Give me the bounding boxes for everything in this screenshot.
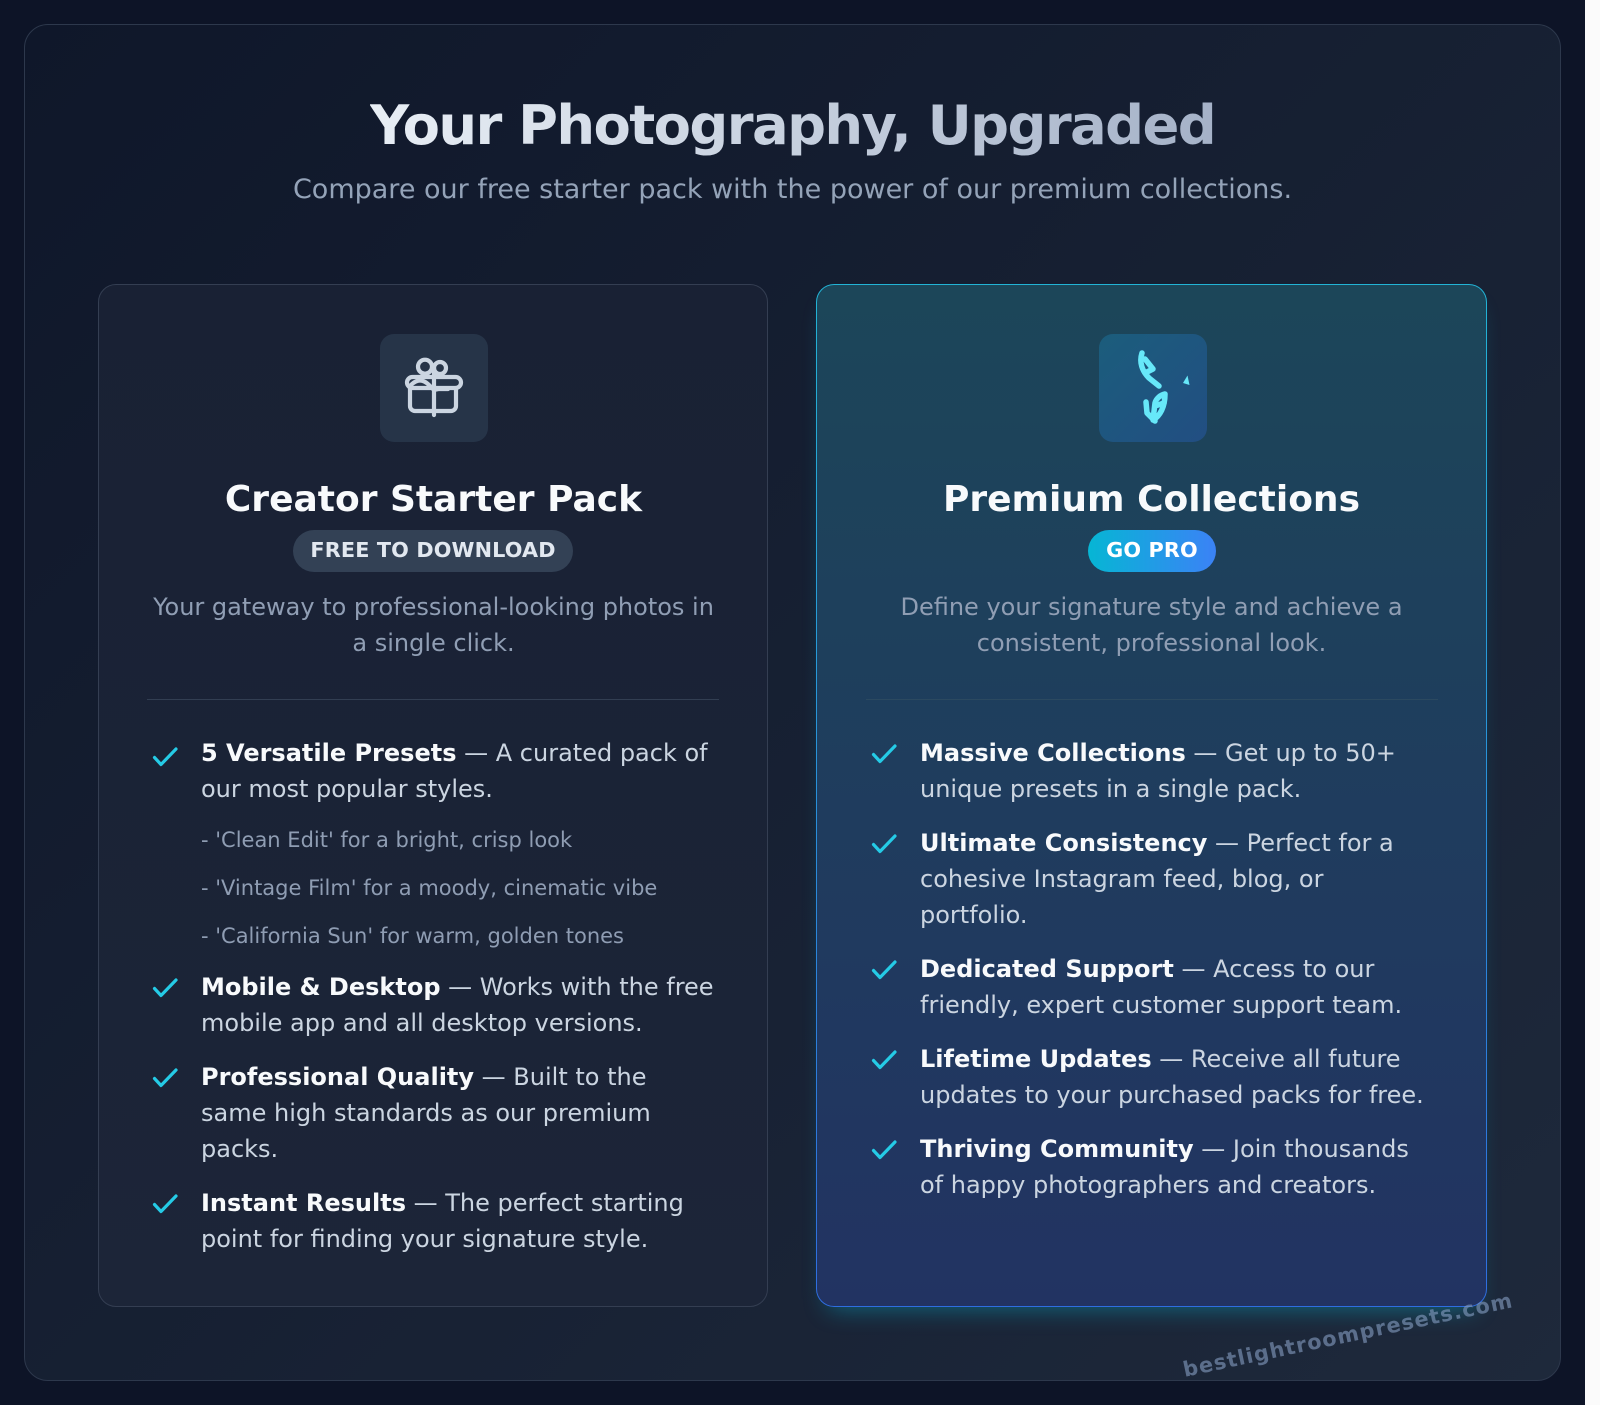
icon: premium glyph: [1099, 334, 1207, 442]
icon: gift: [380, 334, 488, 442]
check icon: [152, 1068, 178, 1088]
feature: Instant Results: Instant Results — The perfect starting: [201, 1189, 684, 1217]
feature: Ultimate Consistency: cohesive Instagram feed, blog, or: [920, 865, 1323, 893]
feature: Massive Collections: unique presets in a single pack.: [920, 775, 1301, 803]
description: starter pack: [153, 593, 714, 657]
check icon: [872, 834, 897, 854]
feature: Thriving Community: Thriving Community — Join thousands: [920, 1135, 1409, 1163]
feature: 5 Versatile Presets: [201, 739, 708, 803]
description: premium: [900, 593, 1403, 657]
note: Vintage Film: - 'Vintage Film' for a moody, cinematic vibe: [201, 876, 657, 900]
description: starter pack: Your gateway to professional-looking photos in: [153, 593, 714, 621]
badge: free to download: FREE TO DOWNLOAD: [310, 538, 556, 562]
check icon: [152, 1194, 178, 1214]
check icon: [872, 1050, 897, 1070]
feature: Mobile and Desktop: mobile app and all desktop versions.: [201, 1009, 643, 1037]
description: premium: consistent, professional look.: [977, 629, 1326, 657]
badge: free to download: [293, 530, 573, 572]
feature: Ultimate Consistency: [920, 829, 1394, 929]
panel: Creator Starter Pack: [98, 284, 768, 1307]
note: California Sun: - 'California Sun' for warm, golden tones: [201, 924, 624, 948]
feature: Instant Results: point for finding your signature style.: [201, 1225, 648, 1253]
feature: Ultimate Consistency: portfolio.: [920, 901, 1028, 929]
feature: Professional Quality: packs.: [201, 1135, 278, 1163]
feature: Professional Quality: same high standards as our premium: [201, 1099, 651, 1127]
feature: Lifetime Updates: Lifetime Updates — Receive all future: [920, 1045, 1401, 1073]
check icon: [872, 1140, 897, 1160]
feature: Dedicated Support: [920, 955, 1402, 1019]
watermark: bestlightroompresets.com: [1181, 1288, 1515, 1382]
feature: Instant Results: [201, 1189, 684, 1253]
description: starter pack: a single click.: [352, 629, 515, 657]
feature: Lifetime Updates: updates to your purchased packs for free.: [920, 1081, 1424, 1109]
note: Clean Edit: - 'Clean Edit' for a bright, crisp look: [201, 828, 572, 852]
feature: 5 Versatile Presets: our most popular styles.: [201, 775, 493, 803]
feature: Professional Quality: [201, 1063, 651, 1163]
feature: Lifetime Updates: [920, 1045, 1424, 1109]
feature: Massive Collections: Massive Collections — Get up to 50+: [920, 739, 1396, 767]
panel: Premium Collections: [816, 284, 1487, 1307]
badge: go pro: [1088, 530, 1216, 572]
badge: go pro: GO PRO: [1106, 538, 1198, 562]
check icon: [872, 960, 897, 980]
feature: Thriving Community: [920, 1135, 1409, 1199]
feature: Thriving Community: of happy photographers and creators.: [920, 1171, 1376, 1199]
feature: Professional Quality: Professional Quality — Built to the: [201, 1063, 646, 1091]
check icon: [152, 747, 178, 766]
subtitle: Compare our free starter pack with the power of our premium collections.: [293, 174, 1292, 205]
heading: Creator Starter Pack: Creator Starter Pack: [225, 479, 642, 520]
feature: Massive Collections: [920, 739, 1396, 803]
feature: Mobile and Desktop: [201, 973, 714, 1037]
feature: Dedicated Support: friendly, expert customer support team.: [920, 991, 1402, 1019]
feature: 5 Versatile Presets: 5 Versatile Presets — A curated pack of: [201, 739, 708, 767]
feature: Ultimate Consistency: Ultimate Consistency — Perfect for a: [920, 829, 1394, 857]
check icon: [872, 744, 897, 764]
check icon: [152, 978, 178, 998]
heading: Premium Collections: Premium Collections: [943, 479, 1360, 520]
feature: Dedicated Support: Dedicated Support — Access to our: [920, 955, 1374, 983]
description: premium: Define your signature style and achieve a: [900, 593, 1403, 621]
title: Your Photography, Upgraded: [370, 94, 1215, 157]
feature: Mobile and Desktop: Mobile & Desktop — Works with the free: [201, 973, 714, 1001]
